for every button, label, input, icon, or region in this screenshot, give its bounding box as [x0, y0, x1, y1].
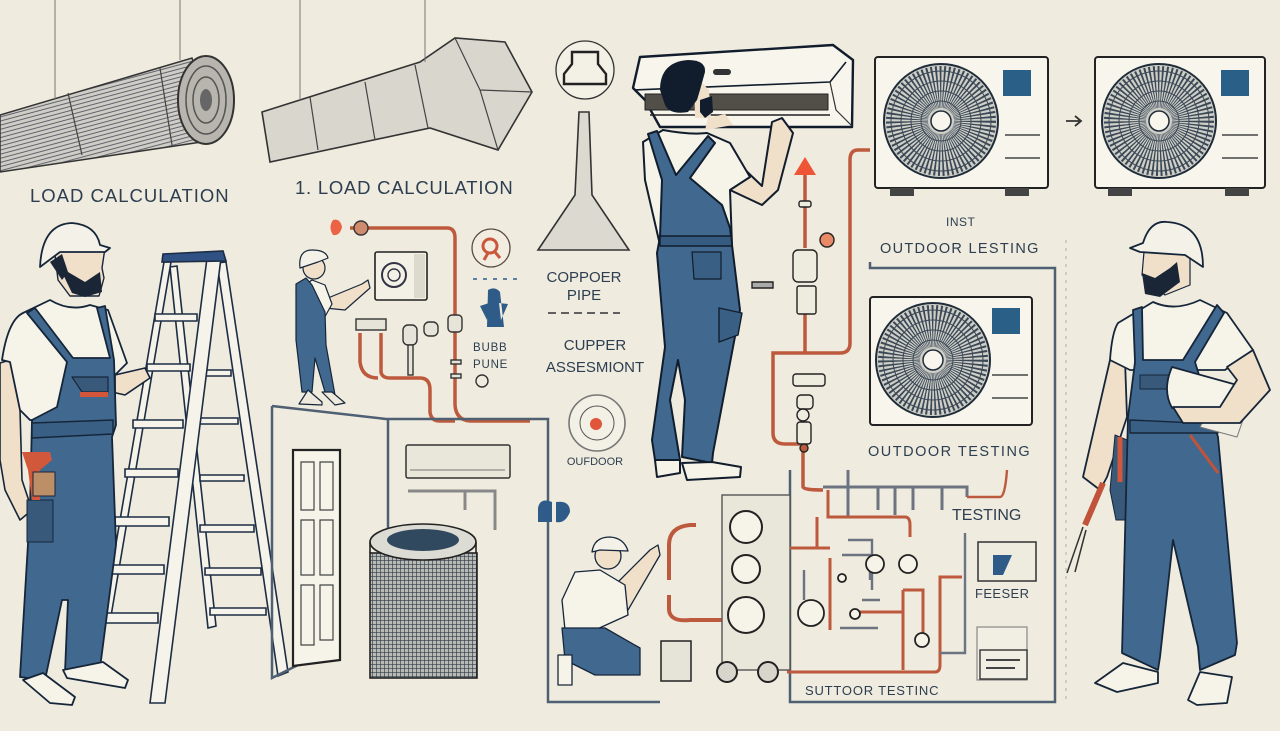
condenser unit — [370, 524, 477, 678]
caption: cupper assessment: ASSESMIONT — [546, 359, 644, 376]
valves centre — [752, 201, 834, 452]
caption: copper pipe — [546, 269, 622, 304]
door — [293, 450, 340, 666]
outdoor unit top 2 — [1095, 57, 1265, 196]
gauges network — [798, 555, 929, 647]
indoor AC unit main — [633, 45, 853, 127]
copper pipes centre — [773, 150, 870, 490]
heading: load calculation numbered: 1. LOAD CALCULATION — [295, 177, 514, 198]
room wall lines — [272, 262, 1055, 702]
outdoor unit top 1 — [875, 57, 1048, 196]
divider: dotted line — [473, 278, 517, 280]
technician right — [1067, 222, 1270, 705]
caption: outdoor: OUFDOOR — [567, 456, 623, 468]
duct: flexible elbow — [262, 0, 532, 162]
piping network — [787, 470, 1007, 672]
caption: bulb: BUBB — [473, 342, 508, 354]
caption: copper pipe: COPPOER — [546, 269, 622, 286]
duct: insulated roll — [0, 0, 234, 172]
icon: blue arrow figure — [480, 288, 508, 327]
heading: load calculation left: LOAD CALCULATION — [30, 185, 230, 206]
divider dots — [548, 312, 620, 314]
technician centre — [643, 60, 793, 480]
icon: red search — [472, 229, 510, 267]
icon: outdoor dial — [569, 395, 625, 451]
pipes in room — [408, 491, 495, 530]
form card — [977, 627, 1027, 680]
caption: feeser: FEESER — [975, 586, 1029, 601]
copper pipes upper — [350, 228, 530, 421]
caption: copper pipe: PIPE — [567, 287, 601, 304]
caption: pune: PUNE — [473, 359, 508, 371]
technician small upper — [296, 250, 370, 405]
form panel feeser — [978, 542, 1036, 581]
caption: outdoor testing: OUTDOOR TESTING — [868, 444, 1031, 460]
ladder — [103, 251, 288, 703]
gauges panel — [661, 495, 790, 682]
valves upper — [330, 220, 462, 378]
icon: small gauge — [476, 375, 488, 387]
dotted guide line — [1065, 240, 1067, 700]
icon: circle fixture — [556, 41, 614, 99]
thermostat — [375, 252, 427, 300]
technician kneeling — [558, 537, 660, 685]
arrow between units — [1066, 116, 1081, 126]
icon: hood lamp — [538, 112, 629, 250]
icon: blue logo — [538, 500, 570, 522]
caption: outdoor lesting: OUTDOOR LESTING — [880, 241, 1040, 257]
caption: suttoor testinc: SUTTOOR TESTINC — [805, 683, 939, 698]
caption: cupper assessment — [546, 337, 644, 376]
outdoor unit middle — [870, 297, 1032, 425]
caption: testing: TESTING — [952, 507, 1021, 524]
technician left — [0, 223, 150, 705]
indoor unit small — [406, 445, 510, 478]
red arrow — [794, 157, 816, 175]
caption: cupper assessment: CUPPER — [564, 337, 626, 354]
caption: inst: INST — [946, 215, 976, 229]
